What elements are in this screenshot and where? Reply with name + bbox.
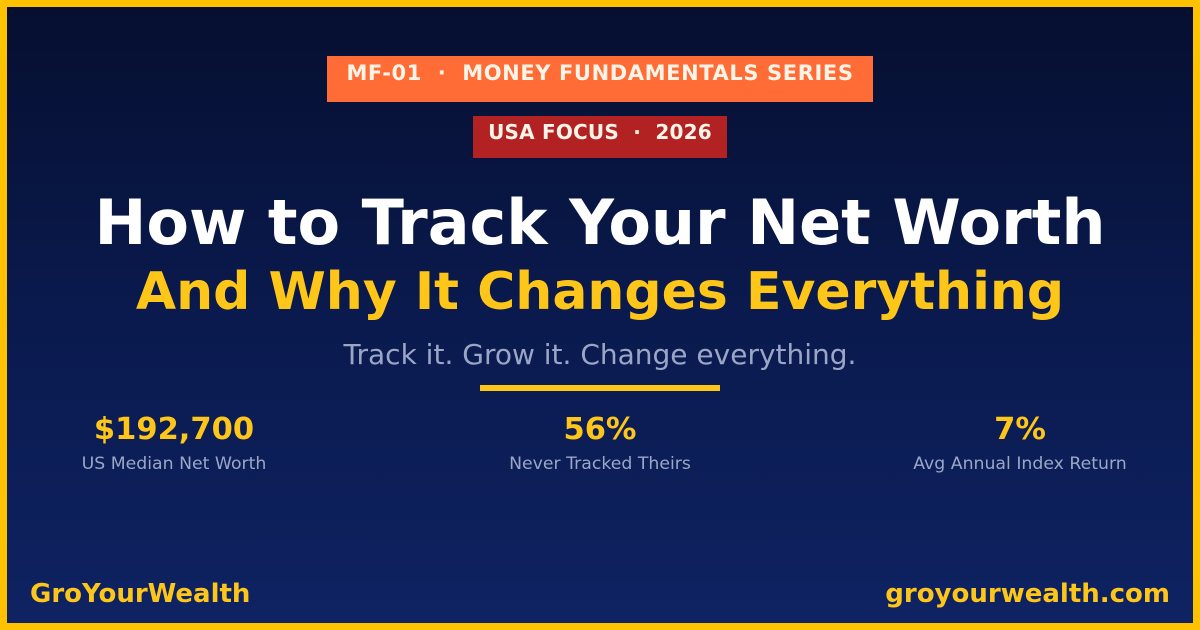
stat: index return: Avg Annual Index Return <box>913 454 1127 474</box>
stat: index return: 7% <box>994 412 1046 447</box>
badge: series <box>327 56 873 102</box>
subtitle: And Why It Changes Everything <box>136 262 1064 322</box>
title: How to Track Your Net Worth <box>94 186 1106 259</box>
badge: series: MF-01 · MONEY FUNDAMENTALS SERIES <box>346 61 854 85</box>
badge: focus <box>473 116 727 158</box>
badge: focus: USA FOCUS · 2026 <box>488 120 712 144</box>
footer brand: GroYourWealth <box>30 579 250 609</box>
tagline: Track it. Grow it. Change everything. <box>344 338 856 371</box>
stat: never tracked <box>509 412 691 474</box>
accent underline <box>480 385 720 391</box>
stat: median net worth <box>82 412 266 474</box>
stat: index return <box>913 412 1127 474</box>
stat: median net worth: $192,700 <box>94 412 254 447</box>
footer url: groyourwealth.com <box>885 579 1170 609</box>
stat: median net worth: US Median Net Worth <box>82 454 266 474</box>
stat: never tracked: Never Tracked Theirs <box>509 454 691 474</box>
stat: never tracked: 56% <box>563 412 636 447</box>
